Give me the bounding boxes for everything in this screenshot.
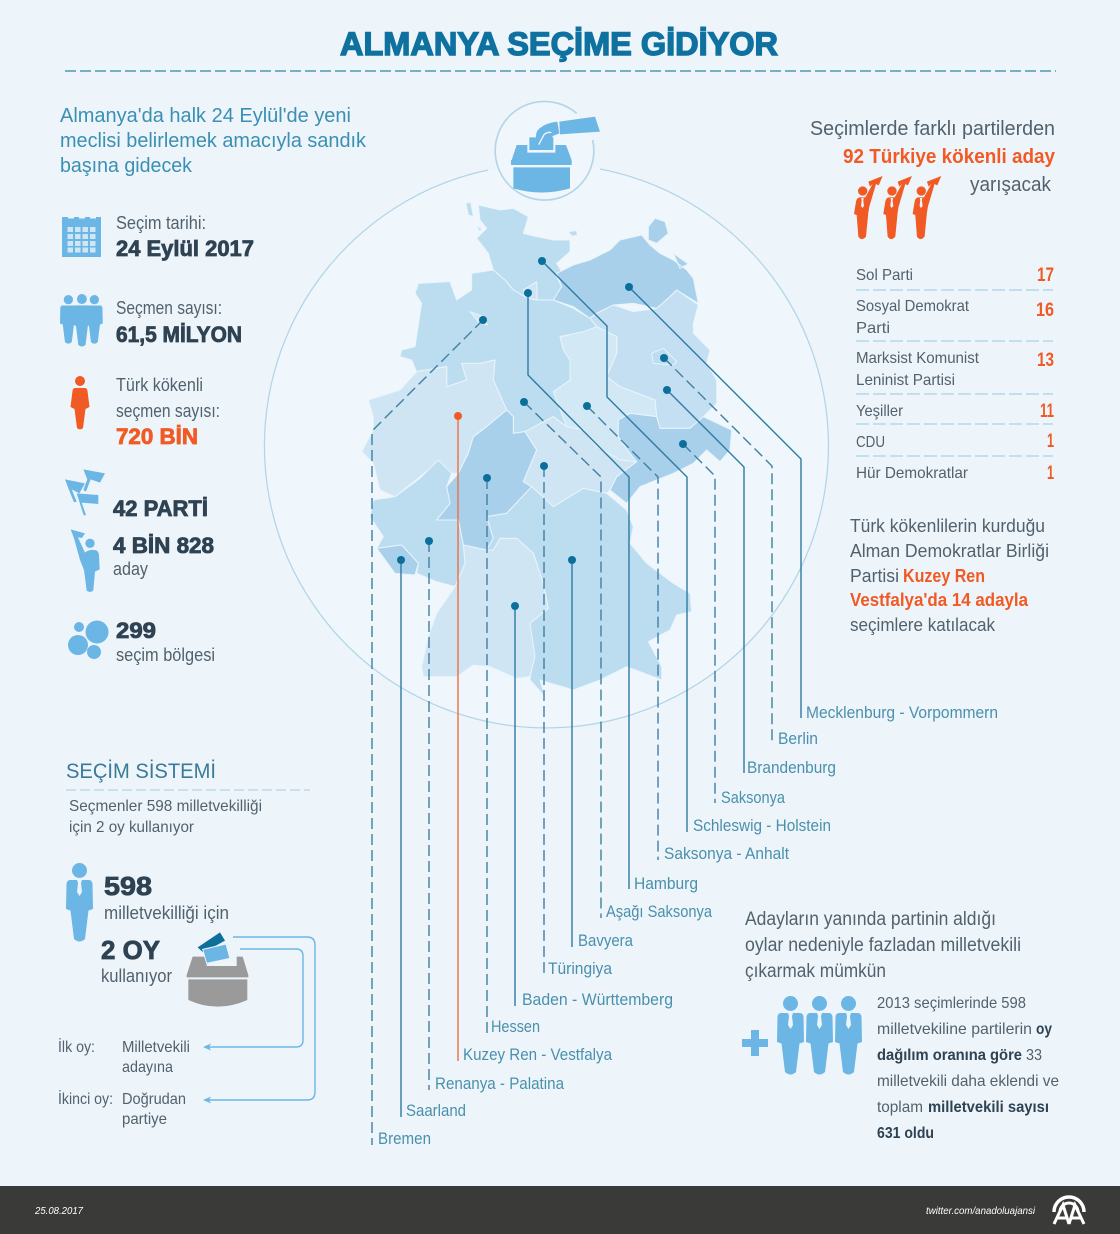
leader: Kuzey Ren-Vestfalya bbox=[454, 412, 612, 1064]
leader: Berlin bbox=[660, 354, 818, 748]
leader: Hamburg: Hamburg bbox=[634, 874, 698, 893]
leader: Bremen: Bremen bbox=[378, 1129, 431, 1148]
stat: Turkish-origin voters: 720 BİN bbox=[116, 424, 198, 449]
row: Marksist Komunist Leninist Partisi: Leninist Partisi bbox=[856, 372, 955, 389]
leader: Berlin: Berlin bbox=[778, 729, 818, 748]
stat: districts: seçim bölgesi bbox=[116, 645, 215, 665]
paragraph: Alman Demokratlar Birliği: Vestfalya'da 14 adayla bbox=[850, 590, 1029, 610]
intro text: Almanya'da halk 24 Eylül'de yeni bbox=[60, 105, 351, 127]
row: Yeşiller bbox=[856, 401, 1054, 422]
icon: circles bbox=[68, 620, 108, 659]
stat: voters bbox=[60, 294, 242, 347]
leader: Schleswig-Holstein bbox=[538, 257, 831, 835]
paragraph: Alman Demokratlar Birliği: Türk kökenlilerin kurduğu bbox=[850, 516, 1045, 536]
leader: Schleswig-Holstein: Schleswig - Holstein bbox=[693, 816, 831, 835]
paragraph: 2013 elections: oy bbox=[1036, 1021, 1052, 1038]
stat: Turkish-origin voters: Türk kökenli bbox=[116, 375, 203, 395]
leader lines and state labels bbox=[372, 257, 998, 1148]
paragraph: 2013 elections: dağılım oranına göre bbox=[877, 1047, 1022, 1064]
row: Marksist Komunist Leninist Partisi: 13 bbox=[1037, 350, 1054, 371]
paragraph: Alman Demokratlar Birliği: Kuzey Ren bbox=[903, 566, 985, 586]
icon: three people bbox=[60, 294, 103, 347]
state: Lower Saxony bbox=[400, 270, 597, 433]
leader: Mecklenburg-Vorpommern: Mecklenburg - Vorpommern bbox=[806, 703, 998, 722]
first vote text: adayına bbox=[122, 1059, 173, 1076]
paragraph: 2013 elections: milletvekili sayısı bbox=[928, 1099, 1049, 1116]
state: Schleswig-Holstein bbox=[466, 202, 577, 300]
state: Thuringia bbox=[523, 417, 637, 507]
state: Hamburg bbox=[523, 282, 537, 300]
paragraph: 2013 elections: toplam bbox=[877, 1099, 923, 1116]
title: ALMANYA SEÇİME GİDİYOR bbox=[340, 26, 778, 62]
leader: Baden-Württemberg: Baden - Württemberg bbox=[522, 990, 673, 1009]
state: Hesse bbox=[437, 410, 537, 550]
second vote text: İkinci oy: bbox=[58, 1089, 113, 1108]
leader: Saksonya-Anhalt bbox=[583, 402, 789, 863]
paragraph: 2013 elections: 631 oldu bbox=[877, 1125, 934, 1142]
state: Bremen bbox=[470, 312, 487, 325]
heading: Turkish-origin candidates: yarışacak bbox=[970, 174, 1052, 196]
stat: election date: 24 Eylül 2017 bbox=[116, 236, 254, 261]
paragraph: 2013 elections: milletvekiline partilerin bbox=[877, 1021, 1032, 1038]
row: Marksist Komunist Leninist Partisi bbox=[856, 350, 1054, 389]
paragraph: extra seats bbox=[745, 909, 1021, 982]
heading: Seçim Sistemi: SEÇİM SİSTEMİ bbox=[66, 760, 216, 783]
row: Marksist Komunist Leninist Partisi: Marksist Komunist bbox=[856, 350, 980, 367]
map of Germany bbox=[362, 202, 732, 697]
row: Sosyal Demokrat Parti: 16 bbox=[1036, 300, 1054, 321]
text: 2 votes: 2 OY bbox=[101, 935, 160, 965]
footer bar bbox=[0, 1186, 1120, 1234]
first vote text bbox=[58, 1037, 190, 1076]
text: 2 votes: kullanıyor bbox=[101, 966, 172, 986]
leader: Türingiya: Türingiya bbox=[548, 959, 612, 978]
leader: Bavyera: Bavyera bbox=[578, 931, 633, 950]
second vote text bbox=[58, 1089, 186, 1128]
state: Rhineland-Palatinate bbox=[370, 460, 465, 587]
icon: grey ballot box bbox=[187, 932, 248, 1007]
leader: Bremen bbox=[372, 316, 487, 1148]
state: Brandenburg bbox=[590, 290, 717, 428]
heading: Seçim Sistemi: için 2 oy kullanıyor bbox=[69, 819, 195, 836]
stat: parties bbox=[65, 469, 208, 521]
row: Hür Demokratlar: Hür Demokratlar bbox=[856, 465, 969, 482]
icon: member of parliament bbox=[66, 863, 93, 942]
icon: plus sign bbox=[742, 1030, 768, 1056]
heading: Turkish-origin candidates bbox=[810, 118, 1056, 196]
row: Sol Parti bbox=[856, 265, 1054, 286]
stat: voters: 61,5 MİLYON bbox=[116, 322, 242, 347]
state: Saxony bbox=[610, 413, 732, 503]
second vote text: partiye bbox=[122, 1111, 167, 1128]
stat: election date bbox=[62, 213, 254, 261]
first vote text: İlk oy: bbox=[58, 1037, 95, 1056]
footer bar: 25.08.2017 bbox=[34, 1206, 83, 1217]
state: Berlin bbox=[652, 348, 677, 365]
text: 598 seats: milletvekilliği için bbox=[104, 903, 229, 923]
paragraph: Alman Demokratlar Birliği: seçimlere katılacak bbox=[850, 615, 996, 635]
paragraph: Alman Demokratlar Birliği: Alman Demokratlar Birliği bbox=[850, 541, 1049, 561]
paragraph: 2013 elections: milletvekili daha eklendi ve bbox=[877, 1073, 1059, 1090]
icon: three orange candidates bbox=[854, 176, 941, 239]
paragraph: Alman Demokratlar Birliği: Partisi bbox=[850, 566, 899, 586]
leader: Hamburg bbox=[524, 289, 698, 893]
paragraph: Alman Demokratlar Birliği bbox=[850, 516, 1049, 635]
row: Sosyal Demokrat Parti bbox=[856, 298, 1054, 337]
row: Sol Parti: 17 bbox=[1037, 265, 1054, 286]
leader: Bavyera bbox=[568, 556, 633, 950]
icon: orange person bbox=[70, 376, 90, 430]
state: Mecklenburg-Vorpommern bbox=[553, 218, 698, 318]
paragraph: extra seats: oylar nedeniyle fazladan milletvekili bbox=[745, 935, 1021, 956]
leader: Hessen: Hessen bbox=[491, 1017, 540, 1036]
stat: parties: 42 PARTİ bbox=[113, 496, 208, 521]
state: North Rhine-Westphalia bbox=[362, 360, 507, 497]
arrows from ballot to vote types bbox=[203, 937, 315, 1104]
leader: Brandenburg bbox=[663, 386, 836, 777]
row: CDU: 1 bbox=[1047, 431, 1054, 452]
leader: Aşağı Saksonya: Aşağı Saksonya bbox=[606, 902, 712, 921]
leader: Hessen bbox=[483, 474, 540, 1036]
row: Sosyal Demokrat Parti: Parti bbox=[856, 320, 890, 337]
leader: Brandenburg: Brandenburg bbox=[747, 758, 836, 777]
icon: calendar bbox=[62, 217, 101, 257]
stat: candidates: 4 BİN 828 bbox=[113, 533, 214, 558]
leader: Aşağı Saksonya bbox=[520, 398, 712, 921]
leader: Baden-Württemberg bbox=[511, 602, 673, 1009]
paragraph: 2013 elections: 2013 seçimlerinde 598 bbox=[877, 995, 1026, 1012]
row: Sol Parti: Sol Parti bbox=[856, 267, 913, 284]
first vote text: Milletvekili bbox=[122, 1039, 190, 1056]
leader: Kuzey Ren-Vestfalya: Kuzey Ren - Vestfalya bbox=[463, 1045, 612, 1064]
icon: ballot box in circle bbox=[495, 101, 600, 200]
stat: candidates: aday bbox=[113, 559, 148, 579]
stat: voters: Seçmen sayısı: bbox=[116, 298, 222, 318]
state: Bavaria bbox=[487, 487, 692, 697]
text: 598 seats: 598 bbox=[104, 871, 152, 901]
state: Saxony-Anhalt bbox=[553, 327, 657, 462]
paragraph: 2013 elections: 33 bbox=[1026, 1047, 1042, 1064]
row: Yeşiller: Yeşiller bbox=[856, 403, 904, 420]
stat: Turkish-origin voters bbox=[70, 375, 220, 449]
icon: three deputies bbox=[777, 996, 862, 1074]
leader: Saksonya: Saksonya bbox=[721, 788, 785, 807]
leader: Renanya-Palatina: Renanya - Palatina bbox=[435, 1074, 564, 1093]
stat: districts bbox=[68, 618, 215, 665]
leader: Renanya-Palatina bbox=[425, 537, 564, 1093]
row: CDU: CDU bbox=[856, 434, 885, 451]
text: 598 seats bbox=[104, 871, 229, 923]
row: Yeşiller: 11 bbox=[1040, 401, 1054, 422]
heading: Seçim Sistemi: Seçmenler 598 milletvekilliği bbox=[69, 798, 262, 815]
state: Baden-Württemberg bbox=[422, 538, 548, 678]
leader: Mecklenburg-Vorpommern bbox=[625, 283, 998, 722]
row: CDU bbox=[856, 431, 1054, 452]
row: Sosyal Demokrat Parti: Sosyal Demokrat bbox=[856, 298, 970, 315]
paragraph: extra seats: çıkarmak mümkün bbox=[745, 961, 886, 982]
leader: Saksonya bbox=[679, 440, 785, 807]
intro text bbox=[60, 105, 367, 177]
stat: election date: Seçim tarihi: bbox=[116, 213, 206, 233]
second vote text: Doğrudan bbox=[122, 1091, 186, 1108]
stat: districts: 299 bbox=[116, 618, 156, 643]
stat: Turkish-origin voters: seçmen sayısı: bbox=[116, 401, 220, 421]
text: 2 votes bbox=[101, 935, 172, 986]
icon: candidate with flag bbox=[71, 529, 100, 592]
leader: Saarland: Saarland bbox=[406, 1101, 466, 1120]
big circle behind the map bbox=[264, 169, 828, 728]
icon: AA logo bbox=[1054, 1197, 1084, 1224]
heading: Turkish-origin candidates: Seçimlerde farklı partilerden bbox=[810, 118, 1055, 140]
leader: Türingiya bbox=[540, 462, 612, 978]
icon: flags bbox=[65, 469, 105, 515]
row: Hür Demokratlar bbox=[856, 463, 1054, 484]
stat: candidates bbox=[71, 529, 214, 592]
heading: Turkish-origin candidates: 92 Türkiye kökenli aday bbox=[843, 146, 1056, 168]
footer bar: twitter.com/anadoluajansi bbox=[926, 1205, 1036, 1217]
state: Saarland bbox=[377, 545, 418, 575]
leader: Saksonya-Anhalt: Saksonya - Anhalt bbox=[664, 844, 789, 863]
intro text: başına gidecek bbox=[60, 155, 193, 177]
table: parties and candidate counts bbox=[856, 265, 1054, 484]
heading: Seçim Sistemi bbox=[66, 760, 310, 836]
row: Hür Demokratlar: 1 bbox=[1047, 463, 1054, 484]
paragraph: 2013 elections bbox=[877, 995, 1059, 1142]
intro text: meclisi belirlemek amacıyla sandık bbox=[60, 130, 367, 152]
leader: Saarland bbox=[397, 556, 466, 1120]
paragraph: extra seats: Adayların yanında partinin aldığı bbox=[745, 909, 996, 930]
